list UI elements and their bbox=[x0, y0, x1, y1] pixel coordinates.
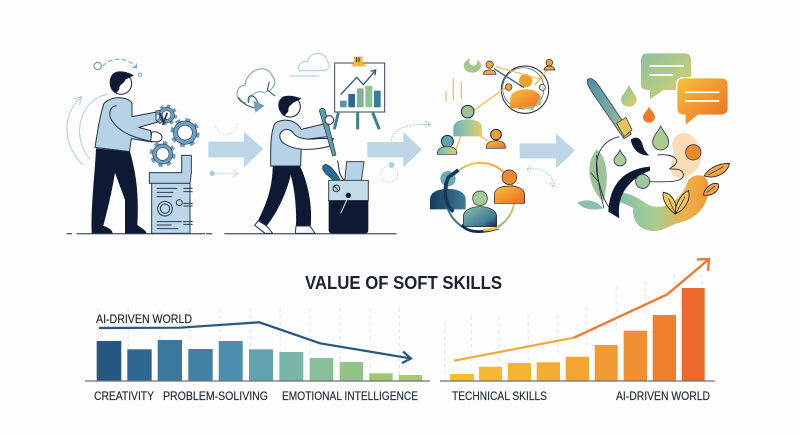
node dots bbox=[505, 84, 512, 90]
hair bbox=[110, 71, 134, 93]
ground line bbox=[67, 232, 212, 236]
presentation board bbox=[334, 57, 385, 129]
team member: right bbox=[494, 170, 525, 203]
chart: technical skills rising bbox=[440, 259, 715, 403]
arm bbox=[280, 129, 333, 149]
trend line: lower section bbox=[454, 338, 574, 361]
small person: top right bbox=[544, 59, 555, 70]
worker figure bbox=[92, 71, 167, 234]
axis label: problem-solving: PROBLEM-SOLIVING bbox=[163, 391, 268, 403]
grid lines bbox=[445, 267, 702, 381]
head bbox=[110, 73, 132, 94]
motion arcs bbox=[67, 59, 142, 165]
flowing colour blob bbox=[612, 175, 708, 231]
left leaves bbox=[577, 149, 607, 210]
axis bbox=[85, 380, 430, 382]
dark swoosh bbox=[608, 167, 650, 218]
speech bubble: orange bbox=[677, 78, 728, 126]
worker figure bbox=[255, 96, 336, 233]
trousers bbox=[92, 148, 147, 234]
axis label: creativity: CREATIVITY bbox=[94, 391, 154, 403]
dashed arrow stub bbox=[420, 121, 431, 127]
team member: bottom bbox=[462, 191, 498, 232]
small leaves bbox=[663, 163, 729, 214]
cloud with arrow bbox=[237, 69, 275, 113]
axis label: emotional intelligence: EMOTIONAL INTELLIGENCE bbox=[282, 391, 418, 403]
speech bubble: green bbox=[641, 53, 691, 99]
machine bbox=[149, 155, 193, 233]
team ring bbox=[446, 163, 515, 232]
bars bbox=[97, 340, 422, 381]
nodes bbox=[686, 145, 701, 160]
arrow: third process arrow bbox=[520, 133, 575, 187]
axis label: AI-driven world: AI-DRIVEN WORLD bbox=[616, 391, 710, 403]
hands bbox=[151, 110, 167, 142]
device bbox=[323, 161, 368, 234]
chart: soft skills declining bbox=[85, 308, 430, 403]
hair bbox=[278, 96, 302, 116]
peach blob bbox=[671, 133, 701, 178]
thin flowing lines bbox=[596, 137, 683, 208]
connector lines bbox=[456, 67, 547, 150]
focus circle with person bbox=[501, 66, 549, 113]
person: left bbox=[437, 135, 457, 154]
person: right bbox=[486, 129, 505, 148]
clip bbox=[351, 57, 367, 66]
trend line bbox=[99, 322, 411, 363]
axis label: technical skills: TECHNICAL SKILLS bbox=[452, 391, 547, 403]
grid lines bbox=[98, 308, 399, 375]
person: centre bbox=[453, 105, 482, 136]
axis bbox=[440, 380, 715, 382]
droplets bbox=[614, 85, 669, 166]
bars bbox=[340, 101, 347, 107]
panel: person writing with chart bbox=[224, 54, 397, 234]
head bbox=[280, 96, 300, 117]
signal lines bbox=[446, 78, 461, 102]
brush bbox=[587, 79, 649, 155]
team member: left bbox=[430, 170, 466, 212]
decorative blob bbox=[464, 59, 481, 73]
gears bbox=[151, 106, 198, 165]
arrow: first process arrow bbox=[208, 123, 263, 177]
shirt bbox=[271, 120, 327, 166]
title: VALUE OF SOFT SKILLS bbox=[305, 272, 502, 293]
shirt bbox=[95, 98, 159, 152]
trend line: upper section with arrow bbox=[574, 259, 709, 338]
panel: person adjusting gears bbox=[67, 59, 212, 234]
panel: creative brush and nature bbox=[577, 53, 729, 231]
trousers bbox=[258, 166, 311, 227]
bars bbox=[450, 288, 705, 381]
panel: connected people network bbox=[420, 58, 555, 232]
trend bbox=[341, 70, 376, 95]
shoes bbox=[255, 221, 315, 233]
small cloud bbox=[289, 54, 329, 76]
small person: top bbox=[483, 61, 496, 74]
ground line bbox=[224, 232, 397, 236]
pen bbox=[319, 108, 336, 156]
arrow: second process arrow bbox=[367, 121, 431, 182]
line label: AI-DRIVEN WORLD bbox=[96, 314, 192, 326]
